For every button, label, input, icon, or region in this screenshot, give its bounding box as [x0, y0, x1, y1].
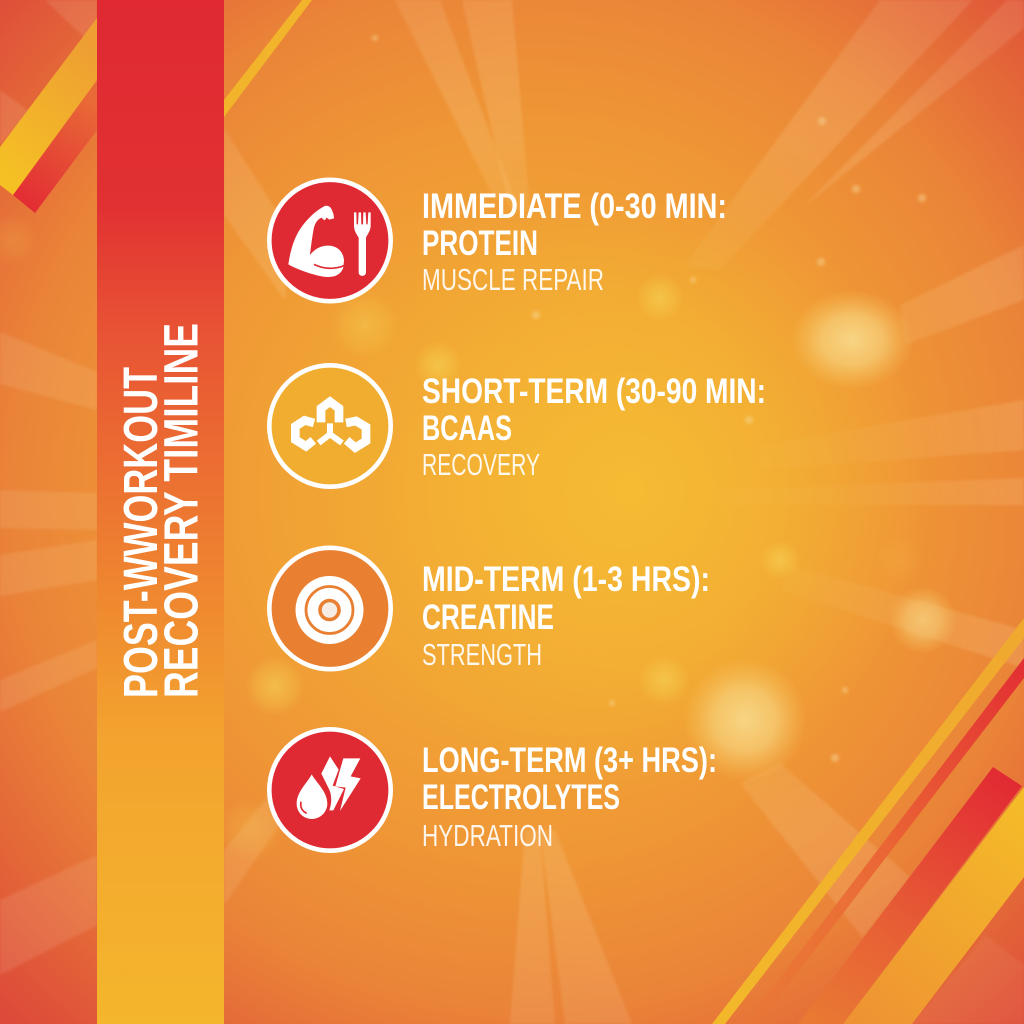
text: immediate protein muscle repair: PROTEIN [422, 224, 538, 263]
text: short-term BCAAs recovery: RECOVERY [422, 447, 540, 482]
text: long-term electrolytes hydration: LONG-TERM (3+ HRS): [422, 741, 717, 780]
timeline item: mid-term creatine [269, 548, 710, 672]
text: long-term electrolytes hydration [422, 741, 717, 853]
heading: post-workout recovery timeline: POST-WWORKOUT [115, 367, 168, 698]
icon: flexed arm and fork [269, 180, 391, 301]
text: mid-term creatine strength: STRENGTH [422, 637, 542, 672]
icon: water drop, crystal and lightning bolt [269, 729, 391, 851]
text: immediate protein muscle repair: IMMEDIATE (0-30 MIN: [422, 187, 727, 226]
text: short-term BCAAs recovery [422, 372, 766, 482]
heading: post-workout recovery timeline [115, 323, 208, 698]
timeline item: long-term electrolytes [269, 729, 717, 853]
top-left diagonal stripes [0, 0, 312, 213]
text: immediate protein muscle repair: MUSCLE REPAIR [422, 262, 604, 297]
text: mid-term creatine strength: MID-TERM (1-3 HRS): [422, 560, 710, 599]
heading: post-workout recovery timeline: RECOVERY TIMILINE [156, 323, 208, 698]
bottom-right diagonal stripes [712, 618, 1024, 1024]
text: short-term BCAAs recovery: BCAAS [422, 409, 512, 448]
text: long-term electrolytes hydration: HYDRATION [422, 818, 553, 853]
text: mid-term creatine strength [422, 560, 710, 672]
icon: BCAA molecule [269, 365, 391, 487]
icon: weight plate target [269, 548, 391, 669]
text: short-term BCAAs recovery: SHORT-TERM (30-90 MIN: [422, 372, 766, 411]
text: immediate protein muscle repair [422, 187, 727, 297]
text: mid-term creatine strength: CREATINE [422, 598, 554, 637]
text: long-term electrolytes hydration: ELECTROLYTES [422, 778, 620, 817]
timeline item: immediate protein [269, 180, 727, 301]
timeline item: short-term BCAAs [269, 365, 766, 487]
vertical title band [97, 0, 224, 1024]
